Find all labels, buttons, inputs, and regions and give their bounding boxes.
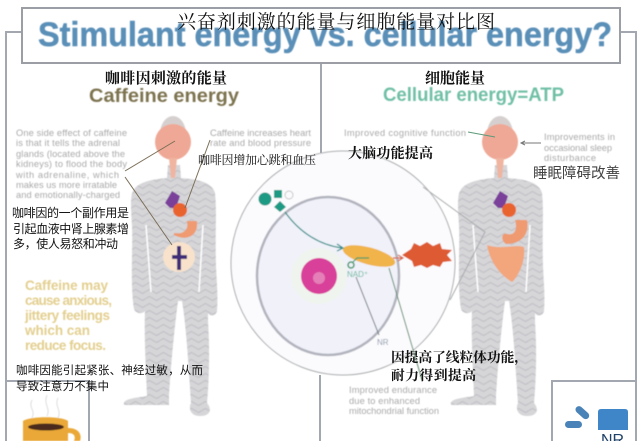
- text: sleep: disturbance: [544, 153, 596, 163]
- title: English: Stimulant energy vs. cellular energy?: [38, 16, 612, 54]
- text: side effect: makes us more irratable: [16, 180, 117, 190]
- callout: yellow caffeine text: [24, 278, 112, 353]
- text: endurance: Improved endurance: [349, 385, 437, 395]
- zh label: anxiety: 咖啡因能引起紧张、神经过敏，从而: [16, 363, 203, 377]
- endurance line: [389, 268, 422, 380]
- heading: caffeine Chinese: 咖啡因刺激的能量: [105, 69, 227, 87]
- left head: [155, 116, 191, 178]
- icon: coffee mug: [23, 395, 81, 441]
- zh label: side effect: 引起血液中肾上腺素增: [13, 221, 129, 236]
- zh label: heart rate: 咖啡因增加心跳和血压: [198, 152, 316, 167]
- zh label: sleep: 睡眠障碍改善: [533, 164, 620, 182]
- zh label: mitochondria: 耐力得到提高: [391, 367, 476, 383]
- arrow: sleep: [521, 141, 541, 145]
- text: sleep: Improvements in: [544, 132, 615, 142]
- title: Chinese: 兴奋剂刺激的能量与细胞能量对比图: [177, 11, 495, 33]
- text: endurance: due to enhanced: [349, 396, 420, 406]
- text: side effect: with adrenaline, which: [15, 170, 119, 180]
- nucleus halo: [291, 248, 347, 304]
- text: side effect: glands (located above the: [16, 149, 125, 159]
- NAD label: NAD⁺: [347, 270, 368, 279]
- cell diagram: [231, 151, 485, 380]
- left arm gaps: [146, 225, 203, 292]
- oxygen symbol: [285, 191, 293, 199]
- nucleolus: [313, 272, 325, 284]
- figure: right body: [451, 116, 544, 416]
- heading: Caffeine energy: Caffeine energy: [89, 86, 239, 107]
- zh label: mitochondria: [391, 349, 528, 383]
- text: side effect: [15, 128, 127, 200]
- text: heart rate: [210, 128, 311, 148]
- leader lines: left figure: [125, 140, 210, 245]
- heading: cellular Chinese: 细胞能量: [425, 69, 485, 87]
- left stomach: [174, 222, 196, 237]
- arrow to burst: [393, 255, 403, 261]
- left heart: [165, 191, 187, 217]
- nutrient molecules: [258, 190, 286, 212]
- left kidneys and adrenal: [163, 242, 195, 272]
- zh label: side effect: 多，使人易怒和冲动: [13, 236, 118, 251]
- NR inset box: [552, 381, 636, 441]
- icon: NR bottle and pills: [565, 405, 628, 441]
- text: cognitive: Improved cognitive function: [344, 128, 466, 138]
- ATP burst: [402, 242, 452, 268]
- callout: yellow caffeine text: cause anxious,: [25, 293, 112, 308]
- NR line: [356, 277, 379, 335]
- right heart: [493, 191, 516, 217]
- right stomach: [502, 220, 528, 244]
- NR label: NR: [377, 338, 389, 347]
- zh label: brain function: 大脑功能提高: [348, 145, 433, 161]
- callout: yellow caffeine text: Caffeine may: [25, 278, 108, 293]
- title box: [22, 8, 620, 63]
- text: sleep: [544, 132, 615, 163]
- coffee inset box: [6, 381, 89, 441]
- zh label: side effect: 咖啡因的一个副作用是: [12, 205, 129, 220]
- zh label: anxiety: 导致注意力不集中: [16, 379, 109, 393]
- text: heart rate: Caffeine increases heart: [210, 128, 311, 138]
- cell membrane: [257, 197, 399, 355]
- text: side effect: kidneys) to flood the body: [16, 159, 127, 169]
- mitochondrion: [341, 241, 397, 271]
- figure: left body: [124, 116, 217, 416]
- arrow: cognitive: [468, 132, 495, 137]
- text: sleep: occasional sleep: [544, 143, 612, 153]
- right arm gaps: [473, 225, 530, 292]
- right intestines: [487, 245, 524, 282]
- callout: yellow caffeine text: reduce focus.: [25, 338, 106, 353]
- zoom lines to right figure: [423, 187, 485, 300]
- callout: yellow caffeine text: which can: [24, 323, 90, 338]
- zh label: mitochondria: 因提高了线粒体功能，: [391, 349, 528, 366]
- text: endurance: [349, 385, 439, 416]
- text: side effect: One side effect of caffeine: [16, 128, 127, 138]
- nucleus: [301, 258, 337, 294]
- zh label: side effect: [12, 205, 129, 251]
- heading: Cellular energy=ATP: Cellular energy=ATP: [383, 85, 564, 106]
- text: side effect: is that it tells the adrenal: [16, 138, 120, 148]
- text: endurance: mitochondrial function: [349, 406, 439, 416]
- NAD icon: [348, 258, 369, 268]
- zh label: anxiety: [16, 363, 203, 393]
- text: side effect: and emotionally-charged: [16, 190, 120, 200]
- cell outer zoom circle: [231, 151, 455, 375]
- right head: [482, 116, 518, 178]
- text: heart rate: rate and blood pressure: [210, 138, 311, 148]
- nutrient arrow: [285, 212, 343, 251]
- callout: yellow caffeine text: jittery feelings: [24, 308, 110, 323]
